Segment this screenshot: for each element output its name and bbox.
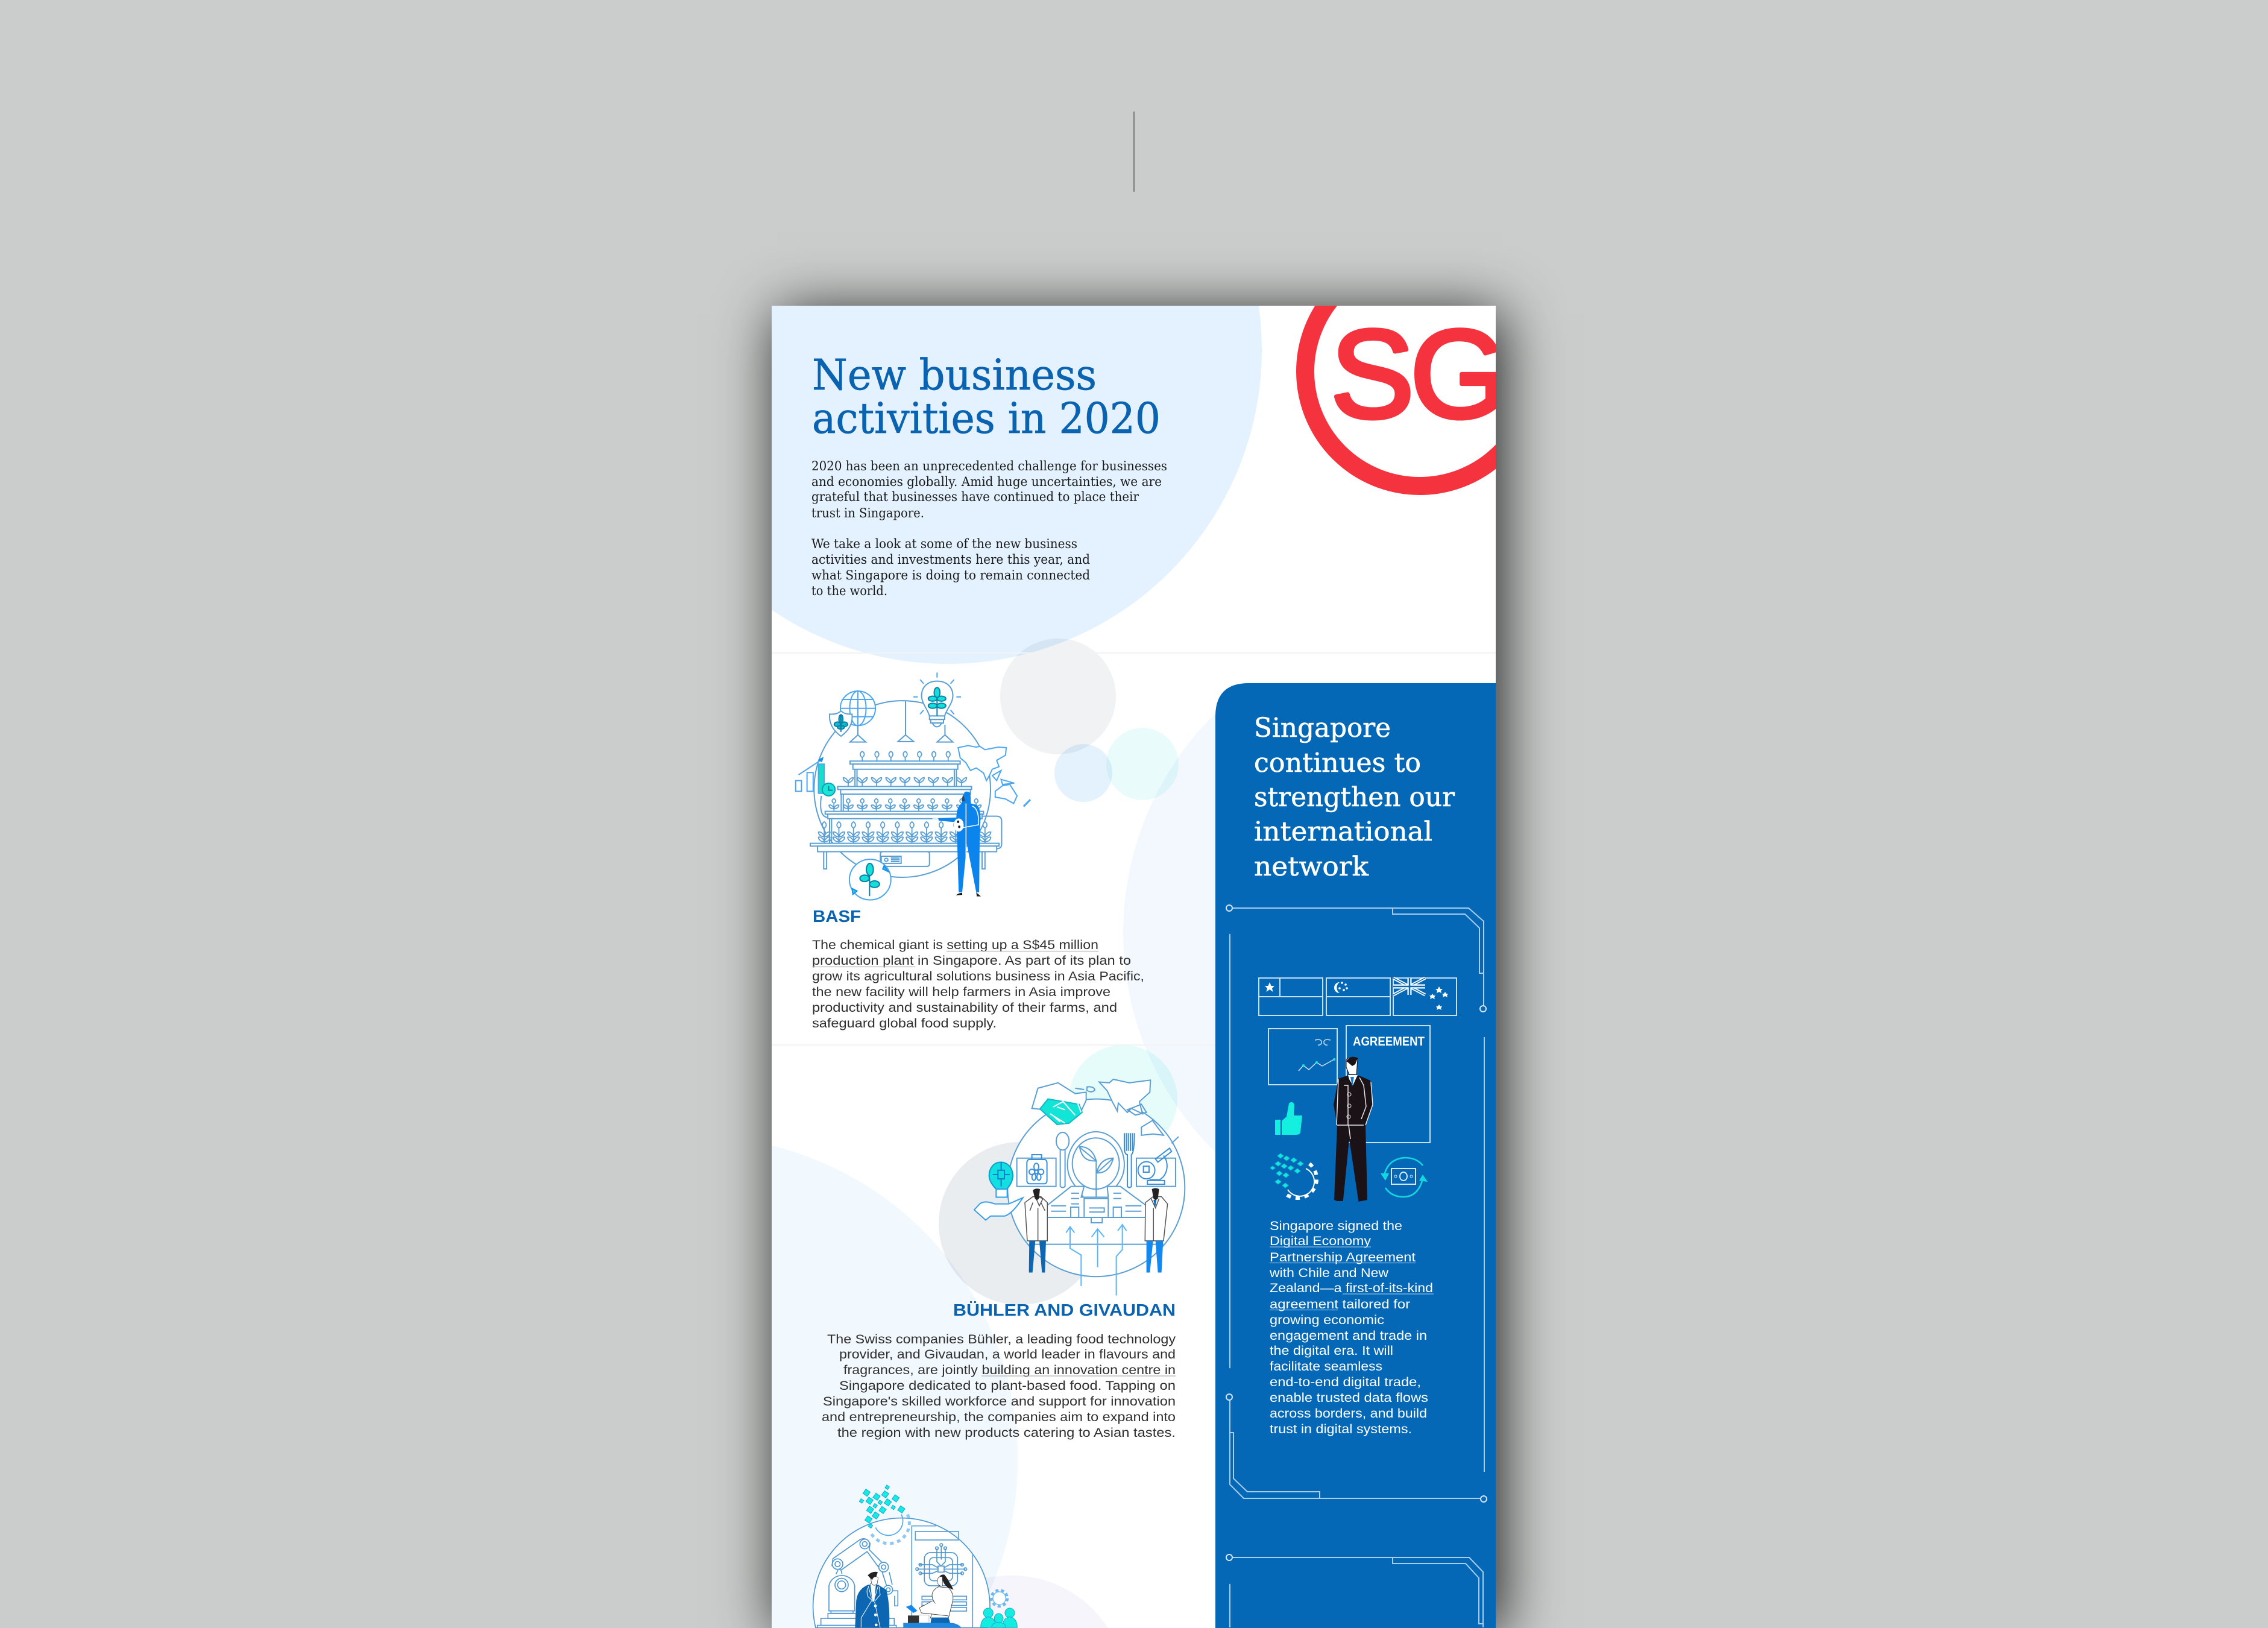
text: BASF description: productivity and sustainability of their farms, and [812, 1000, 1117, 1015]
intro text: 2020 has been an unprecedented challenge for businesses [811, 459, 1167, 473]
panel heading: strengthen our [1254, 782, 1455, 813]
panel body text: growing economic [1270, 1313, 1384, 1327]
intro text: grateful that businesses have continued to place their [811, 490, 1139, 504]
panel body text: facilitate seamless [1270, 1359, 1382, 1374]
text: Buhler and Givaudan description: Singapore dedicated to plant-based food. Tapping on [839, 1378, 1176, 1393]
heading: Buhler and Givaudan: BÜHLER AND GIVAUDAN [953, 1301, 1176, 1319]
panel body text: engagement and trade in [1270, 1328, 1427, 1343]
intro text: trust in Singapore. [811, 506, 924, 520]
text: BASF description: safeguard global food supply. [812, 1016, 997, 1030]
panel body text: agreement tailored for [1270, 1297, 1410, 1311]
worker [956, 792, 981, 892]
robot arm [832, 1539, 882, 1570]
text: Buhler and Givaudan description: fragrances, are jointly building an innovation centre in [843, 1363, 1176, 1377]
agreement document: AGREEMENT [1353, 1035, 1425, 1049]
illustration: industry robotics [813, 1485, 1017, 1628]
text: BASF description: production plant in Singapore. As part of its plan to [812, 953, 1131, 968]
panel body text: Zealand—a first-of-its-kind [1270, 1281, 1433, 1295]
circuit frame two [1226, 1554, 1483, 1627]
panel body text: Partnership Agreement [1270, 1250, 1416, 1264]
figure: businessman [1334, 1057, 1373, 1202]
text: BASF description [812, 938, 1144, 1030]
panel heading: international [1254, 816, 1432, 847]
illustration: Buhler and Givaudan food innovation [974, 1079, 1185, 1295]
intro text: We take a look at some of the new business [811, 537, 1077, 551]
background circles [634, 36, 1496, 1628]
agreement document [1346, 1026, 1430, 1143]
panel heading [1254, 713, 1455, 882]
icon: thumbs up [1275, 1102, 1302, 1135]
chip [924, 1553, 957, 1586]
intro text: activities and investments here this year, and [811, 552, 1090, 567]
infographic page [772, 306, 1496, 1628]
flags: Chile, Singapore, New Zealand [1259, 978, 1457, 1015]
thin vertical tick mark [1133, 112, 1135, 192]
text: Buhler and Givaudan description [822, 1332, 1176, 1440]
title: activities in 2020 [812, 394, 1161, 443]
icon: money exchange [1381, 1158, 1428, 1197]
circuit frame one [1226, 905, 1487, 1502]
panel body text: trust in digital systems. [1270, 1422, 1412, 1436]
text: Buhler and Givaudan description: Singapore's skilled workforce and support for innovation [823, 1394, 1176, 1409]
panel body text: enable trusted data flows [1270, 1390, 1428, 1405]
text: Buhler and Givaudan description: The Swiss companies Bühler, a leading food technology [827, 1332, 1176, 1346]
panel body text [1269, 1219, 1434, 1436]
panel body text: across borders, and build [1270, 1406, 1427, 1421]
panel heading: Singapore [1254, 713, 1391, 743]
intro text: to the world. [811, 584, 887, 598]
gear [870, 1515, 909, 1544]
small gear and people [991, 1590, 1007, 1606]
intro text: what Singapore is doing to remain connected [811, 568, 1090, 582]
panel body text: Digital Economy [1270, 1234, 1371, 1248]
text: Buhler and Givaudan description: provider, and Givaudan, a world leader in flavours and [839, 1347, 1176, 1361]
logo: SG in red ring [1305, 257, 1534, 486]
text: Buhler and Givaudan description: and entrepreneurship, the companies aim to expand into [822, 1410, 1176, 1424]
intro text [811, 459, 1167, 598]
logo: SG in red ring: S [1331, 306, 1414, 444]
panel: Singapore continues to strengthen [1215, 683, 1496, 1628]
text: Buhler and Givaudan description: the region with new products catering to Asian tastes. [837, 1425, 1176, 1440]
chart box [1268, 1029, 1337, 1085]
woman with tablet [930, 1587, 953, 1618]
panel body text: the digital era. It will [1270, 1343, 1393, 1358]
panel heading: continues to [1254, 748, 1421, 778]
intro text: and economies globally. Amid huge uncertainties, we are [811, 475, 1162, 489]
text: BASF description: The chemical giant is setting up a S$45 million [812, 938, 1098, 952]
icon: digital gear [1270, 1153, 1317, 1198]
man in suit [855, 1585, 889, 1628]
text: BASF description: the new facility will help farmers in Asia improve [812, 985, 1110, 999]
panel body text: Singapore signed the [1270, 1219, 1402, 1233]
heading: BASF: BASF [813, 907, 861, 926]
panel body text: end-to-end digital trade, [1270, 1375, 1421, 1389]
title [812, 350, 1161, 443]
panel body text: with Chile and New [1269, 1266, 1389, 1280]
text: BASF description: grow its agricultural solutions business in Asia Pacific, [812, 969, 1144, 983]
illustration: BASF vertical farm [796, 672, 1030, 900]
scientist right [1145, 1188, 1168, 1273]
title: New business [812, 350, 1097, 400]
panel heading: network [1254, 851, 1369, 882]
asia map [958, 746, 1006, 781]
scientist left [1025, 1188, 1047, 1273]
